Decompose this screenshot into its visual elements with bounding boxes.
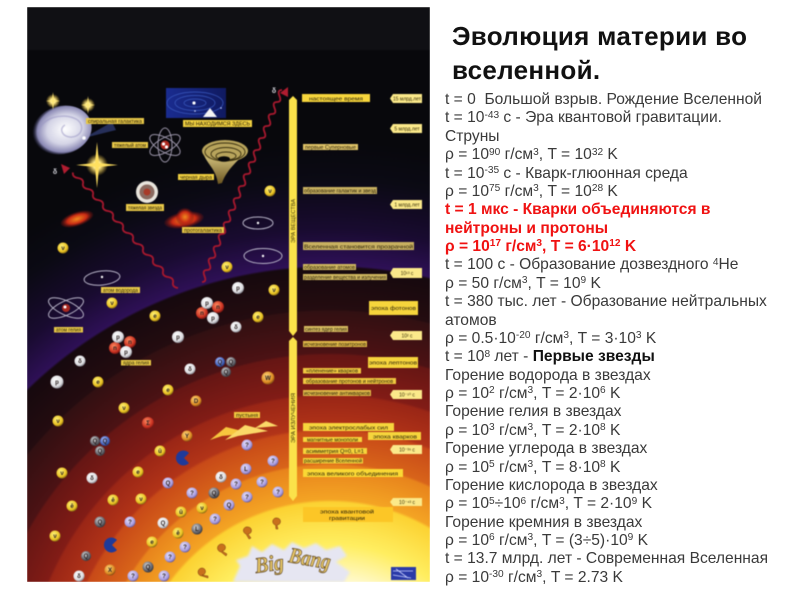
particles: coloured balls: Σ — [146, 421, 150, 427]
particles: coloured balls: p — [236, 286, 240, 292]
title — [452, 21, 747, 85]
timeline event labels: эпоха фотонов — [371, 306, 416, 312]
object labels: атом водорода — [103, 288, 138, 294]
title: вселенной. — [452, 55, 600, 85]
object labels: атом гелия — [56, 328, 81, 334]
particles: coloured balls: p — [55, 380, 59, 386]
icons: protogalaxies — [60, 208, 204, 229]
particles: coloured balls — [50, 186, 284, 582]
particles: coloured balls: Q — [103, 439, 108, 445]
particles: coloured balls: ? — [183, 545, 187, 551]
icon: heavy atom — [147, 128, 183, 162]
text block: chronology of the universe: Горение гелия в звездах — [445, 403, 621, 420]
text block: chronology of the universe: Горение водорода в звездах — [445, 367, 651, 384]
text block: chronology of the universe: t = 0 Большой взрыв. Рождение Вселенной — [445, 91, 762, 108]
object labels: МЫ НАХОДИМСЯ ЗДЕСЬ — [185, 122, 250, 128]
particles: coloured balls: ? — [245, 443, 249, 449]
particles: coloured balls: ν — [268, 189, 272, 195]
text block: chronology of the universe: нейтроны и протоны — [445, 220, 608, 237]
object labels: ядра гелия — [123, 360, 149, 366]
particles: coloured balls: e — [166, 388, 170, 394]
particles: coloured balls: L — [244, 467, 248, 473]
text block: chronology of the universe: t = 1 мкс - Кварки объединяются в — [445, 201, 710, 218]
text block: chronology of the universe: атомов — [445, 312, 497, 328]
particles: coloured balls: Q — [229, 360, 234, 366]
particles: coloured balls: δ — [90, 476, 94, 482]
photon symbols — [53, 88, 276, 176]
image: we are here, solar system — [166, 88, 226, 118]
particles: coloured balls: ν — [139, 497, 143, 503]
text block: chronology of the universe: Горение кремния в звездах — [445, 514, 642, 531]
timeline event labels: первые Суперновые — [305, 145, 356, 151]
text block: chronology of the universe: ρ = 1075 г/см3, T = 1028 K — [445, 183, 618, 200]
particles: coloured balls: δ — [77, 574, 81, 580]
small blue publisher mark — [391, 567, 416, 580]
arrow: left wavy radiation — [61, 164, 178, 288]
timeline event labels: Вселенная становится прозрачной — [304, 243, 413, 250]
timeline bar: era of matter — [289, 96, 297, 336]
time tags: 10¹³ с — [401, 271, 414, 277]
particles: coloured balls: D — [194, 399, 199, 405]
timeline event labels: эпоха лептонов — [369, 360, 417, 366]
particles: coloured balls: p — [205, 301, 209, 307]
text block: chronology of the universe: t = 380 тыс. лет - Образование нейтральных — [445, 293, 767, 310]
background: dark space and concentric epochs — [27, 7, 430, 582]
particles: coloured balls: e — [150, 540, 154, 546]
particles: coloured balls: e — [153, 314, 157, 320]
particles: coloured balls: e — [136, 470, 140, 476]
time tags: 15 млрд.лет — [393, 96, 422, 102]
text block: chronology of the universe: t = 10-43 с - Эра квантовой гравитации. — [445, 109, 722, 126]
icons: bulb shaped particles — [198, 518, 280, 578]
particles: coloured balls: X — [108, 568, 112, 574]
text block: chronology of the universe: Струны — [445, 128, 500, 145]
object labels — [54, 118, 260, 419]
particles: coloured balls: Q — [98, 520, 103, 526]
particles: coloured balls: Q — [218, 360, 223, 366]
particles: coloured balls: ū — [158, 449, 162, 455]
text block: chronology of the universe: Горение кислорода в звездах — [445, 477, 658, 494]
timeline event labels: настоящее время — [309, 96, 363, 102]
particles: coloured balls: ? — [245, 495, 249, 501]
particles: coloured balls: Q — [224, 370, 229, 376]
timeline event labels: гравитации — [329, 516, 365, 522]
particles: coloured balls: ? — [234, 482, 238, 488]
logo: Big Bang: Bang — [286, 542, 333, 574]
particles: coloured balls: δ — [188, 367, 192, 373]
timeline event labels: эпоха великого объединения — [307, 471, 398, 477]
particles: coloured balls: ν — [110, 301, 114, 307]
particles: coloured balls: ē — [176, 531, 180, 537]
particles: coloured balls: ? — [260, 480, 264, 486]
time tags: 10² с — [401, 334, 413, 340]
particles: coloured balls: δ — [234, 325, 238, 331]
particles: coloured balls: ν — [61, 246, 65, 252]
timeline event labels: разделение вещества и излучения — [304, 275, 386, 281]
timeline event labels: эпоха кварков — [373, 434, 417, 440]
object labels: протогалактика — [184, 228, 222, 234]
particles: coloured balls: ? — [271, 459, 275, 465]
timeline event labels: синтез ядер гелия — [305, 327, 347, 333]
arrow: right wavy radiation — [202, 87, 288, 282]
time tags: 10⁻⁴³ с — [399, 500, 415, 506]
particles: coloured balls: ? — [276, 490, 280, 496]
particles: coloured balls: ν — [53, 534, 57, 540]
particles: coloured balls: ? — [213, 517, 217, 523]
text block: chronology of the universe: ρ = 105÷106 г/см3, T = 2·109 K — [445, 495, 652, 512]
particles: coloured balls: Q — [227, 503, 232, 509]
icon: spiral galaxy — [32, 104, 116, 155]
particles: coloured balls: ν — [56, 419, 60, 425]
particles: coloured balls: ? — [190, 491, 194, 497]
particles: coloured balls: p — [116, 335, 120, 341]
particles: coloured balls: ν — [60, 471, 64, 477]
particles: coloured balls: n — [113, 346, 117, 352]
particles: coloured balls: ν — [122, 406, 126, 412]
particles: coloured balls: L — [195, 527, 199, 533]
photon symbols: δ — [53, 169, 57, 176]
particles: coloured balls: Y — [185, 434, 189, 440]
object labels: тяжелый атом — [114, 142, 146, 149]
icons: yellow stars — [46, 92, 118, 188]
particles: coloured balls: ν — [200, 506, 204, 512]
particles: coloured balls: ū — [179, 510, 183, 516]
logo: Big Bang — [254, 547, 332, 576]
particles: coloured balls: ? — [128, 520, 132, 526]
time tags: 10⁻³⁵ с — [399, 448, 415, 454]
timeline bar: era of radiation — [289, 337, 297, 501]
timeline event labels: асимметрия Q=0, L=1 — [306, 449, 364, 455]
timeline event labels: исчезновение позитронов — [304, 342, 366, 348]
time tags: 1 млрд.лет — [394, 202, 420, 208]
timeline event labels: образование протонов и нейтронов — [306, 378, 393, 385]
text block: chronology of the universe: Горение углерода в звездах — [445, 440, 647, 457]
timeline event labels: эпоха электрослабых сил — [309, 425, 388, 431]
timeline event labels: образование галактик и звезд — [304, 188, 377, 194]
particles: coloured balls: e — [256, 315, 260, 321]
text block: chronology of the universe: t = 13.7 млрд. лет - Современная Вселенная — [445, 550, 768, 567]
particles: coloured balls: Q — [166, 481, 171, 487]
particles: coloured balls: ? — [162, 574, 166, 580]
text block: chronology of the universe: ρ = 1090 г/см3, T = 1032 K — [445, 146, 618, 163]
icons: pac-man particles — [104, 451, 189, 552]
particles: coloured balls: Q — [98, 449, 103, 455]
particles: coloured balls: Q — [84, 554, 89, 560]
object labels: спиральная галактика — [88, 119, 142, 125]
particles: coloured balls: Q — [146, 565, 151, 571]
timeline bar: era of radiation: ЭРА ИЗЛУЧЕНИЯ — [291, 393, 297, 443]
text block: chronology of the universe: ρ = 102 г/см3, T = 2·106 K — [445, 385, 620, 402]
timeline event labels: «пленение» кварков — [306, 368, 358, 374]
object labels: черная дыра — [180, 175, 212, 181]
timeline bar: era of matter: ЭРА ВЕЩЕСТВА — [291, 198, 297, 243]
icon: black hole funnel — [202, 140, 248, 184]
particles: coloured balls: δ — [78, 359, 82, 365]
particles: coloured balls: δ — [219, 475, 223, 481]
text block: chronology of the universe: ρ = 0.5·10-20 г/см3, T = 3·103 K — [445, 330, 656, 347]
particles: coloured balls: ē — [70, 504, 74, 510]
object labels: тяжелая звезда — [128, 206, 162, 212]
particles: coloured balls: Q — [93, 439, 98, 445]
icon: desert mountains — [210, 421, 278, 440]
particles: coloured balls: ν — [272, 288, 276, 294]
text block: chronology of the universe — [445, 91, 768, 586]
timeline event labels: эпоха квантовой — [320, 508, 374, 516]
text block: chronology of the universe: ρ = 106 г/см3, T = (3÷5)·109 K — [445, 532, 648, 549]
text block: chronology of the universe: ρ = 10-30 г/см3, T = 2.73 K — [445, 569, 623, 586]
time tags: 5 млрд.лет — [394, 126, 420, 132]
timeline event labels: образование атомов — [304, 265, 355, 271]
text block: chronology of the universe: ρ = 1017 г/см3, T = 6·1012 K — [445, 238, 636, 255]
text block: chronology of the universe: t = 100 с - Образование дозвездного 4He — [445, 256, 738, 273]
particles: coloured balls: e — [96, 380, 100, 386]
object labels: пустыня — [236, 413, 258, 419]
particles: coloured balls: p — [124, 350, 128, 356]
text block: chronology of the universe: ρ = 105 г/см3, T = 8·108 K — [445, 458, 620, 476]
particles: coloured balls: Q — [212, 491, 217, 497]
time tags: 10⁻¹⁰ с — [399, 392, 415, 398]
timeline event labels: исчезновение антикварков — [304, 391, 370, 397]
timeline event labels: расширение Вселенной — [304, 458, 362, 464]
particles: coloured balls: ν — [225, 265, 229, 271]
particles: coloured balls: n — [128, 340, 132, 346]
particles: coloured balls: Q — [161, 521, 166, 527]
particles: coloured balls: p — [176, 335, 180, 341]
particles: coloured balls: ? — [131, 574, 135, 580]
icon: heavy star — [136, 181, 158, 203]
text block: chronology of the universe: t = 108 лет - Первые звезды — [445, 348, 655, 365]
particles: coloured balls: n — [200, 311, 204, 317]
photon symbols: δ — [272, 88, 276, 95]
icons: atom orbits — [46, 217, 282, 322]
particles: coloured balls: p — [211, 316, 215, 322]
text block: chronology of the universe: ρ = 50 г/см3, T = 109 K — [445, 275, 601, 292]
particles: coloured balls: ? — [168, 555, 172, 561]
text block: chronology of the universe: ρ = 103 г/см3, T = 2·108 K — [445, 422, 620, 439]
particles: coloured balls: ē — [111, 498, 115, 504]
particles: coloured balls: W — [265, 376, 271, 382]
timeline event labels — [302, 94, 421, 522]
particles: coloured balls: n — [216, 305, 220, 311]
time tags — [390, 94, 422, 506]
timeline event labels: магнитные монополи — [307, 437, 358, 443]
title: Эволюция материи во — [452, 21, 747, 51]
illustration: evolution of the universe poster — [27, 7, 430, 582]
logo: Big Bang: Big — [252, 549, 285, 578]
text block: chronology of the universe: t = 10-35 с - Кварк-глюонная среда — [445, 164, 688, 182]
